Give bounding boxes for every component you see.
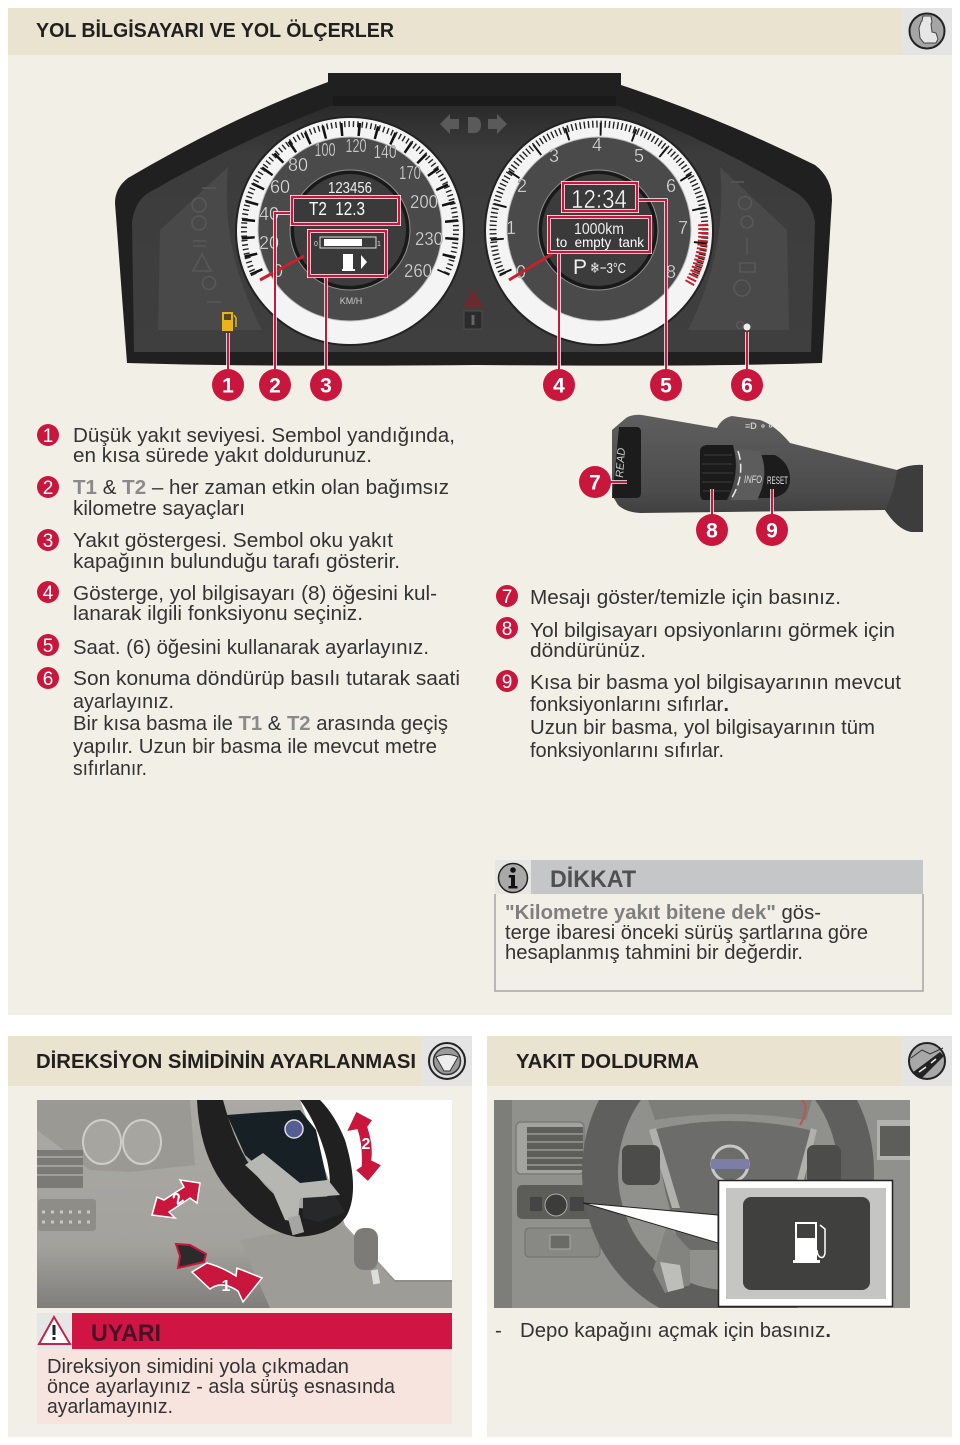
warning box [37,1313,452,1424]
photo: dashboard and fuel button [494,1100,910,1308]
right description list: fonksiyonlarını sıfırlar. [530,693,729,716]
steering column stalk: READ [614,447,628,478]
left description list: lanarak ilgili fonksiyonu seçiniz. [73,602,363,625]
steering wheel [582,1100,874,1308]
icon: road [909,1043,945,1079]
speed scale: 80 [288,155,308,175]
photo: steering wheel adjustment [37,1100,452,1308]
steering column stalk: 7 [589,472,601,494]
left description list: kapağının bulunduğu tarafı gösterir. [73,550,400,573]
right description list: Kısa bir basma yol bilgisayarının mevcut [530,671,901,694]
left telltales [192,188,221,302]
speed scale [259,136,443,306]
fuel gauge readout [314,237,381,271]
right warning wing [688,167,789,330]
steering column stalk: 8 [706,520,718,542]
icon box [902,8,952,55]
note text: hesaplanmış tahmini bir değerdir. [505,941,803,964]
speedometer [235,116,465,346]
headlight symbols: ≡D ⚬⚬ [745,421,774,431]
left description list: 3 [43,531,53,552]
rpm scale: 3 [549,146,559,166]
arrow: release lever: 1 [222,1278,231,1295]
gear shifter [354,1228,378,1270]
left description list: Son konuma döndürüp basılı tutarak saati [73,667,460,690]
number markers: 2 [269,374,281,398]
gear and temperature: ❄−3°C [590,260,626,277]
gauge tops [648,1100,812,1120]
refuelling text: - [495,1319,502,1342]
wheel spokes [245,1153,340,1222]
warning heading: UYARI [91,1320,161,1347]
callout: note [495,860,923,991]
arrow: reach adjust: 2 [170,1190,187,1209]
rpm scale: 2 [517,176,527,196]
panel: steering wheel adjustment [8,1036,472,1437]
heading band [8,8,902,55]
rpm scale: 7 [678,218,688,238]
clock readout: 12:34 [571,184,627,214]
right description list [496,585,901,762]
red callout frames and leader lines [228,183,747,372]
note text: "Kilometre yakıt bitene dek" gös- [505,901,821,924]
right description list: Yol bilgisayarı opsiyonlarını görmek için [530,619,895,642]
left description list: 4 [43,583,54,604]
heading: trip computer: YOL BİLGİSAYARI VE YOL ÖLÇERLER [36,19,394,42]
indicator lights top [440,114,507,134]
needle [509,254,552,280]
right description list: döndürünüz. [530,639,646,662]
reset button [757,455,790,498]
left description list: Düşük yakıt seviyesi. Sembol yandığında, [73,424,455,447]
air vent [37,1150,83,1188]
speed scale: 170 [399,163,421,183]
right description list: 9 [502,672,512,693]
right description list: Mesajı göster/temizle için basınız. [530,586,841,609]
rpm scale: 0 [516,262,526,282]
icon: fuel pump [793,1222,825,1263]
spoke controls [622,1145,660,1185]
steering column stalk: INFO [744,474,762,486]
left description list: en kısa sürede yakıt doldurunuz. [73,444,372,467]
icon: seat [910,14,944,48]
heading band [8,1036,422,1086]
icon: low fuel lamp [222,312,236,331]
needle [260,256,304,280]
left description list: Saat. (6) öğesini kullanarak ayarlayınız. [73,636,429,659]
switch panel [38,1199,96,1231]
instrument gauges [83,1120,161,1164]
number markers: 5 [660,374,672,398]
steering column stalk: RESET [767,475,788,487]
number markers: 4 [553,374,565,398]
heading: steering wheel: DİREKSİYON SİMİDİNİN AYARLANMASI [36,1050,416,1073]
gear and temperature [573,256,626,279]
speed scale: 100 [314,140,336,160]
right telltales [731,182,755,328]
lower spoke [653,1225,690,1293]
stalk end collar [885,465,923,532]
left description list: 5 [43,636,53,657]
air vents [516,1122,584,1174]
number markers [212,369,763,401]
fuel gauge readout: 1 [377,241,381,248]
icon: steering wheel [429,1043,465,1079]
arrow: reach adjust [152,1180,200,1218]
rpm scale: 5 [634,146,644,166]
number markers: 1 [222,374,234,398]
heading band [487,1036,902,1086]
wheel hub [227,1110,327,1184]
steering column stalk [579,415,923,546]
steering wheel [197,1100,353,1237]
left description list: 6 [43,669,53,690]
reset stalk dot [744,324,750,330]
panel: trip computer [8,8,952,1015]
left description list: sıfırlanır. [73,757,147,780]
rpm scale [506,135,688,282]
warning text: ayarlamayınız. [47,1395,173,1418]
heading: refuelling: YAKIT DOLDURMA [516,1050,699,1073]
speed scale: 120 [346,136,366,156]
note text: terge ibaresi önceki sürüş şartlarına göre [505,921,868,944]
red zone [689,224,703,284]
left description list: Gösterge, yol bilgisayarı (8) öğesini kul- [73,582,437,605]
left warning wing [158,167,262,330]
fuel gauge readout: 0 [314,241,318,248]
left description list: 2 [43,478,53,499]
speed scale: 260 [404,261,432,281]
inset: fuel button [583,1180,892,1306]
number markers: 3 [320,374,332,398]
panel: refuelling [487,1036,952,1437]
tachometer [484,116,714,346]
left description list: kilometre sayaçları [73,497,245,520]
arrow: vertical adjust: 2 [362,1136,371,1153]
lever [176,1244,206,1268]
refuelling text: Depo kapağını açmak için basınız. [520,1319,831,1342]
speed scale: 20 [259,233,279,253]
note heading: DİKKAT [550,866,636,893]
speed scale: 0 [273,261,283,281]
warning text: Direksiyon simidini yola çıkmadan [47,1355,349,1378]
range readout: to empty tank [556,234,645,250]
left description list: yapılır. Uzun bir basma ile mevcut metre [73,735,437,758]
read button [612,427,641,498]
left description list: T1 & T2 – her zaman etkin olan bağımsız [73,476,449,499]
range readout: 1000km [574,221,624,238]
number markers: 6 [741,374,753,398]
left description list [37,424,460,780]
gear and temperature: P [573,256,587,279]
speed scale: 230 [415,229,443,249]
arrow: vertical adjust [346,1111,382,1182]
odometer: 123456 [328,180,372,197]
thumbwheel [700,445,736,500]
speed scale: 200 [410,192,438,212]
speed scale: 40 [259,204,279,224]
volvo logo [712,1146,748,1182]
rpm scale: 4 [592,135,602,155]
cluster housing [115,73,832,366]
left description list: 1 [43,426,53,447]
left description list: Yakıt göstergesi. Sembol oku yakıt [73,529,393,552]
light switch panel [517,1185,593,1219]
icon: info [498,864,528,892]
speed scale: 60 [270,177,290,197]
arrow: release lever [192,1263,262,1302]
warning text: önce ayarlayınız - asla sürüş esnasında [47,1375,396,1398]
instrument cluster [115,73,832,372]
left description list: Bir kısa basma ile T1 & T2 arasında geçiş [73,712,448,735]
rpm scale: 6 [666,176,676,196]
range readout [556,221,645,250]
steering column stalk: 9 [766,520,778,542]
right description list: fonksiyonlarını sıfırlar. [530,739,724,762]
trip meter readout: T2 12.3 [309,199,365,219]
warning text [47,1355,396,1418]
warning triangle and info [463,288,483,329]
left description list: ayarlayınız. [73,690,174,713]
info ring [730,449,764,500]
speed scale: KM/H [340,296,362,306]
right description list: 8 [502,619,512,640]
right description list: 7 [502,587,512,608]
rpm scale: 8 [666,262,676,282]
rpm scale: 1 [506,218,516,238]
right description list: Uzun bir basma, yol bilgisayarının tüm [530,716,875,739]
icon: warning triangle [39,1317,70,1344]
note text [505,901,868,964]
speed scale: 140 [374,142,396,162]
leader lines [610,482,772,516]
